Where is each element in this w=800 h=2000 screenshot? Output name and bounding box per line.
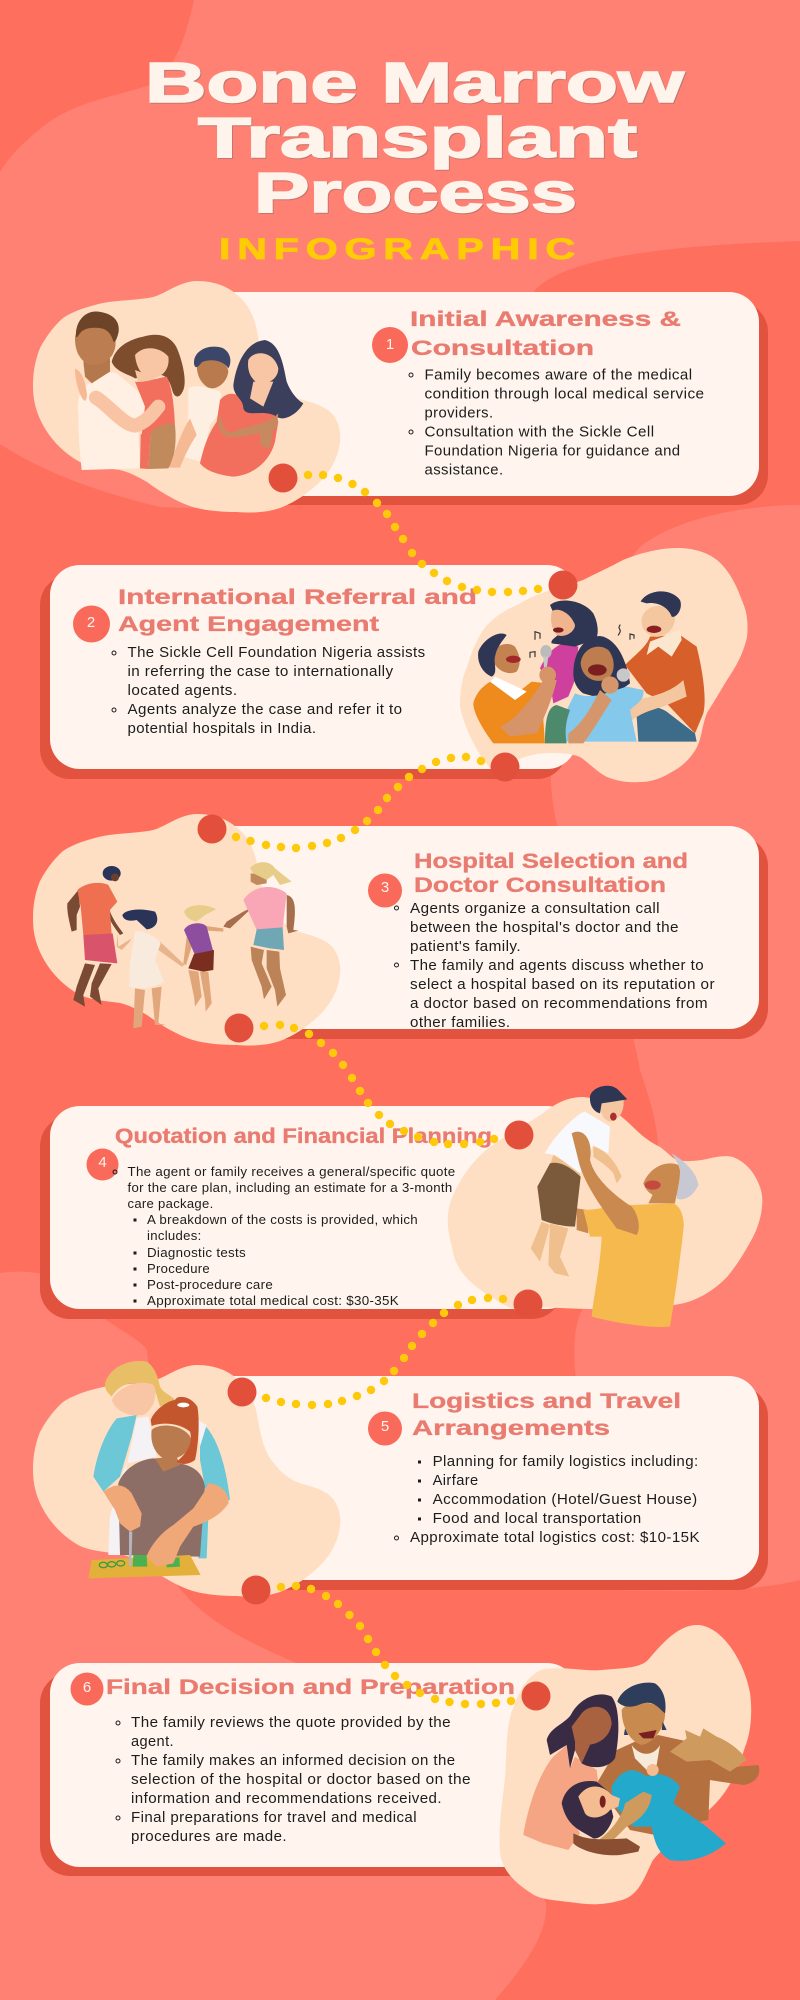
heading 3: Hospital Selection and bbox=[414, 850, 688, 873]
number badge 4: 4 bbox=[98, 1154, 107, 1171]
dotted connector: step 3 to step 4 bbox=[260, 1021, 498, 1148]
blob: step 3 bbox=[33, 814, 340, 1046]
connector dot 2 bbox=[548, 570, 578, 600]
text block 3 bbox=[394, 901, 715, 1031]
text block 6: procedures are made. bbox=[131, 1829, 287, 1845]
text block 6: The family makes an informed decision on the bbox=[131, 1753, 456, 1769]
text block 3: select a hospital based on its reputation or bbox=[410, 977, 715, 993]
number badge 1: 1 bbox=[386, 336, 394, 353]
text block 1: assistance. bbox=[424, 462, 504, 478]
text block 6: agent. bbox=[131, 1734, 174, 1750]
text block 3: between the hospital's doctor and the bbox=[410, 920, 679, 936]
subtitle: INFOGRAPHIC bbox=[219, 233, 582, 266]
text block 2: The Sickle Cell Foundation Nigeria assists bbox=[128, 645, 426, 661]
dotted connector: step 4 to step 5 bbox=[262, 1294, 507, 1409]
text block 4: Procedure bbox=[147, 1261, 210, 1276]
illustration: grandfather lifting child bbox=[531, 1086, 698, 1327]
connector dot 10 bbox=[522, 1682, 550, 1710]
text block 3: The family and agents discuss whether to bbox=[410, 958, 704, 974]
text block 2 bbox=[112, 645, 426, 737]
text block 5: Airfare bbox=[433, 1473, 479, 1489]
connector dot 6 bbox=[504, 1120, 534, 1150]
panel: step 5 logistics bbox=[33, 1361, 768, 1604]
text block 5: Planning for family logistics including: bbox=[433, 1454, 699, 1470]
number badge 4 bbox=[86, 1148, 118, 1180]
panel: step 2 international referral bbox=[40, 548, 748, 782]
text block 4: for the care plan, including an estimate for a 3-month bbox=[128, 1180, 452, 1195]
heading 5: Logistics and Travel bbox=[412, 1390, 681, 1413]
text block 1 bbox=[409, 368, 704, 478]
text block 4: includes: bbox=[147, 1228, 202, 1243]
text block 5 bbox=[394, 1454, 700, 1546]
text block 1: Consultation with the Sickle Cell bbox=[424, 424, 654, 440]
text block 2: located agents. bbox=[128, 683, 238, 699]
heading 1 bbox=[410, 308, 681, 360]
connector dot 7 bbox=[514, 1290, 542, 1318]
title: Bone Marrow bbox=[145, 51, 685, 115]
panel: step 6 final decision bbox=[40, 1625, 759, 1904]
connector dot 8 bbox=[228, 1378, 256, 1406]
blob: step 5 bbox=[33, 1365, 340, 1597]
text block 1: providers. bbox=[424, 406, 494, 422]
text block 4: A breakdown of the costs is provided, which bbox=[147, 1212, 418, 1227]
panel: step 4 quotation bbox=[40, 1086, 762, 1327]
blob: step 2 bbox=[460, 548, 748, 782]
text block 4: Approximate total medical cost: $30-35K bbox=[147, 1293, 399, 1308]
heading 3 bbox=[414, 850, 688, 897]
text block 2: in referring the case to internationally bbox=[128, 664, 394, 680]
heading 4: Quotation and Financial Planning bbox=[115, 1125, 492, 1148]
text block 1: Family becomes aware of the medical bbox=[424, 368, 692, 384]
illustration: family jumping bbox=[67, 862, 298, 1028]
illustration: parents with child bbox=[523, 1683, 759, 1861]
number badge 5 bbox=[368, 1412, 402, 1446]
connector dot 1 bbox=[268, 464, 298, 492]
number badge 1 bbox=[372, 327, 408, 363]
text block 3: a doctor based on recommendations from bbox=[410, 996, 708, 1012]
text block 4: Post-procedure care bbox=[147, 1277, 273, 1292]
text block 4: Diagnostic tests bbox=[147, 1245, 246, 1260]
number badge 2 bbox=[73, 606, 110, 642]
text block 4 bbox=[113, 1164, 456, 1308]
text block 1: condition through local medical service bbox=[424, 386, 704, 402]
number badge 5: 5 bbox=[381, 1418, 389, 1435]
number badge 2: 2 bbox=[87, 614, 95, 631]
dotted connector: step 1 to step 2 bbox=[304, 471, 542, 596]
text block 5: Food and local transportation bbox=[433, 1511, 642, 1527]
title: Process bbox=[254, 161, 577, 225]
number badge 6: 6 bbox=[83, 1679, 91, 1696]
text block 2: potential hospitals in India. bbox=[128, 721, 316, 737]
heading 1: Initial Awareness & bbox=[410, 308, 681, 331]
dotted connector: step 2 to step 3 bbox=[232, 753, 485, 852]
illustration: family singing bbox=[473, 591, 705, 743]
connector dot 4 bbox=[198, 814, 226, 844]
panel: step 1 initial awareness bbox=[33, 281, 768, 513]
text block 4: care package. bbox=[128, 1196, 214, 1211]
number badge 6 bbox=[70, 1672, 104, 1706]
text block 6: information and recommendations received. bbox=[131, 1791, 442, 1807]
title bbox=[145, 51, 685, 225]
heading 6: Final Decision and Preparation bbox=[106, 1676, 515, 1699]
blob: step 1 bbox=[33, 281, 340, 513]
connector dot 3 bbox=[490, 752, 520, 782]
dotted connector: step 5 to step 6 bbox=[277, 1582, 515, 1708]
illustration: parent and child cooking bbox=[88, 1361, 230, 1578]
text block 6: The family reviews the quote provided by the bbox=[131, 1715, 451, 1731]
text block 6 bbox=[116, 1715, 471, 1845]
text block 5: Approximate total logistics cost: $10-15K bbox=[410, 1530, 700, 1546]
heading 2: International Referral and bbox=[118, 586, 477, 609]
text block 3: patient's family. bbox=[410, 939, 521, 955]
text block 4: The agent or family receives a general/specific quote bbox=[128, 1164, 456, 1179]
text block 6: selection of the hospital or doctor based on the bbox=[131, 1772, 471, 1788]
title: Transplant bbox=[198, 106, 637, 170]
illustration: family hugging bbox=[75, 312, 303, 477]
heading 2: Agent Engagement bbox=[118, 613, 379, 636]
text block 1: Foundation Nigeria for guidance and bbox=[424, 444, 680, 460]
text block 5: Accommodation (Hotel/Guest House) bbox=[433, 1492, 698, 1508]
heading 5: Arrangements bbox=[412, 1417, 610, 1440]
blob: step 4 bbox=[448, 1097, 762, 1310]
text block 2: Agents analyze the case and refer it to bbox=[128, 702, 402, 718]
panel: step 3 hospital selection bbox=[33, 814, 768, 1046]
text block 3: Agents organize a consultation call bbox=[410, 901, 660, 917]
blob: step 6 bbox=[500, 1625, 751, 1904]
heading 2 bbox=[118, 586, 477, 636]
number badge 3 bbox=[368, 874, 402, 908]
number badge 3: 3 bbox=[381, 879, 389, 896]
heading 5 bbox=[412, 1390, 681, 1440]
heading 1: Consultation bbox=[411, 337, 594, 360]
text block 3: other families. bbox=[410, 1015, 510, 1031]
heading 3: Doctor Consultation bbox=[414, 874, 666, 897]
text block 6: Final preparations for travel and medical bbox=[131, 1810, 417, 1826]
connector dot 9 bbox=[242, 1576, 270, 1604]
connector dot 5 bbox=[224, 1014, 254, 1042]
